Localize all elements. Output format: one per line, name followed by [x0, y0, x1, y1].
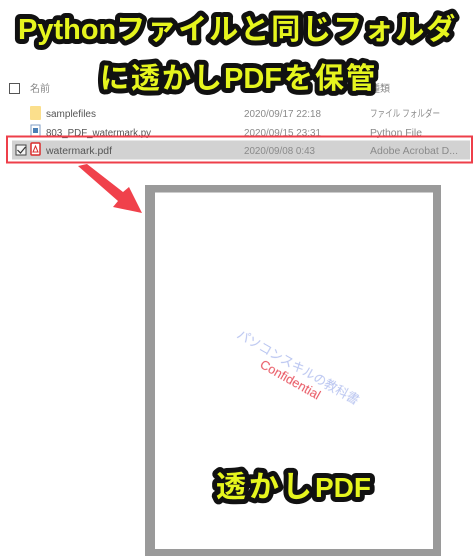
panel: PDF page preview	[145, 185, 441, 556]
column header: type: 種類	[370, 82, 390, 95]
file name: python script: 803_PDF_watermark.py	[46, 128, 151, 139]
date: watermark.pdf: 2020/09/08 0:43	[244, 146, 315, 157]
selected row background	[12, 140, 470, 160]
title line 1: Pythonファイルと同じフォルダ	[18, 12, 457, 46]
red highlight box	[7, 136, 472, 162]
file name: samplefiles: samplefiles	[46, 109, 96, 120]
icon: pdf file	[31, 143, 40, 155]
type: folder: ファイル フォルダー	[370, 107, 440, 120]
label: watermark PDF: 透かしPDF	[216, 471, 371, 504]
selected row checkbox	[16, 145, 26, 155]
icon: python file	[31, 125, 40, 136]
title line 2: に透かしPDFを保管	[100, 62, 377, 95]
arrow: from file row to PDF page	[78, 164, 142, 213]
icon: folder	[30, 106, 41, 120]
type: python: Python File	[370, 128, 422, 139]
column header checkbox	[10, 84, 20, 94]
panel: file explorer listing	[7, 82, 472, 162]
date: samplefiles: 2020/09/17 22:18	[244, 109, 321, 120]
type: acrobat: Adobe Acrobat D...	[370, 146, 458, 157]
column header: name: 名前	[30, 82, 50, 95]
date: python script: 2020/09/15 23:31	[244, 128, 321, 139]
watermark: Confidential: Confidential	[258, 357, 323, 403]
file name: watermark.pdf: watermark.pdf	[45, 146, 112, 157]
watermark: Japanese text: パソコンスキルの教科書	[235, 327, 362, 408]
